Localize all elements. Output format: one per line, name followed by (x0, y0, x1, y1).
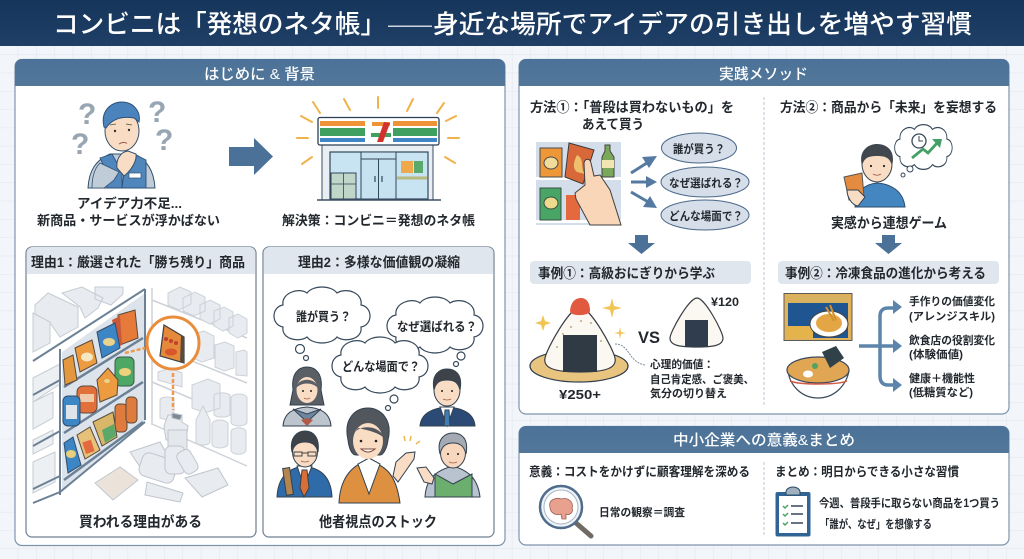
label: ¥120: ¥120 (711, 297, 739, 309)
title banner: コンビニは「発想のネタ帳」 (53, 11, 386, 39)
label: VS: VS (638, 329, 660, 347)
illustration: regular onigiri (670, 298, 723, 347)
text: 解決策: 解決策：コンビニ＝発想のネタ帳 (282, 213, 475, 228)
question bubbles: 誰が買う？ (673, 142, 725, 156)
text: trend list: 健康＋機能性 (909, 371, 975, 385)
question bubbles: どんな場面で？ (669, 209, 743, 223)
caption: 買われる理由がある: 買われる理由がある (79, 513, 202, 531)
panel: 実践メソッド (519, 59, 1009, 414)
heading: 理由1: 理由1：厳選された「勝ち残り」商品 (31, 254, 245, 270)
arrow: problem to solution (229, 138, 273, 175)
illustration: premium onigiri (530, 298, 645, 382)
arrow: down 1 (628, 235, 655, 254)
icon: clipboard (776, 487, 810, 536)
text: 意義: 意義：コストをかけずに顧客理解を深める (529, 464, 750, 479)
question bubbles (661, 133, 749, 230)
heading: 中小企業への意義&まとめ: 中小企業への意義&まとめ (673, 432, 855, 449)
illustration: store shelves (33, 287, 247, 503)
panel: 中小企業への意義&まとめ (519, 426, 1009, 545)
illustration: ramen bowl (787, 346, 849, 398)
text: trend list: (低糖質など) (909, 385, 973, 399)
man with glasses (277, 431, 332, 497)
text: アイデア力不足: 新商品・サービスが浮かばない (37, 213, 220, 228)
businessman (420, 369, 475, 426)
text: アイデア力不足: アイデア力不足... (77, 196, 182, 211)
case bar 1 (530, 261, 751, 284)
text: trend list: 飲食店の役割変化 (909, 333, 995, 347)
text: 心理的価値: 心理的価値： (650, 357, 714, 371)
question bubbles: なぜ選ばれる？ (669, 176, 743, 190)
illustration: frozen noodles package (784, 294, 852, 340)
thought bubbles: 誰が買う？ (296, 309, 351, 324)
illustration: picking unusual product (536, 142, 621, 225)
title banner: ―― (388, 12, 432, 37)
text: 日常の観察＝調査: 日常の観察＝調査 (599, 505, 685, 519)
gray shelf right (152, 287, 247, 466)
people (277, 367, 480, 503)
icon: convenience store (297, 97, 459, 200)
callout: highlighted product (125, 317, 199, 410)
case bar 2: 事例②：冷凍食品の進化から考える (785, 265, 986, 281)
text: まとめ: まとめ：明日からできる小さな習慣 (775, 464, 959, 479)
text: action items: 今週、普段手に取らない商品を1つ買う (819, 496, 1000, 510)
text: action items: 「誰が、なぜ」を想像する (820, 517, 932, 531)
arrows: tree (859, 300, 902, 392)
icon: worker thinking (71, 96, 173, 188)
panel: はじめに & 背景 (15, 59, 505, 546)
woman presenter (339, 408, 420, 503)
text: 心理的価値: 気分の切り替え (650, 386, 727, 400)
subpanel: 理由2 (263, 247, 494, 537)
products (118, 310, 138, 345)
icon: magnifier with brain (540, 486, 591, 536)
text: 心理的価値 (650, 357, 754, 400)
thought bubbles: なぜ選ばれる？ (397, 319, 477, 334)
text: アイデア力不足 (37, 196, 220, 228)
text: 心理的価値: 自己肯定感、ご褒美、 (650, 372, 754, 386)
heading: 理由2: 理由2：多様な価値観の凝縮 (298, 254, 460, 270)
label: ¥250+: ¥250+ (559, 387, 601, 402)
elderly man (417, 433, 480, 497)
text: trend list (909, 294, 995, 399)
text: trend list: (アレンジスキル) (909, 310, 995, 323)
text: trend list: 手作りの価値変化 (909, 294, 995, 308)
arrow: down 2 (875, 235, 902, 254)
icon: worker thinking: ? (148, 96, 166, 129)
case bar 2 (778, 261, 999, 284)
schoolgirl (283, 367, 331, 426)
method 1 heading (530, 99, 734, 132)
gray boxes on top (33, 287, 123, 493)
illustration: imagining future (844, 125, 952, 207)
thought bubbles (274, 287, 483, 410)
caption: 他者視点のストック: 他者視点のストック (319, 513, 437, 531)
text: action items (819, 496, 1000, 531)
subpanel: 理由1 (26, 247, 256, 537)
case bar 1: 事例①：高級おにぎりから学ぶ (538, 265, 715, 281)
thought bubbles: どんな場面で？ (342, 359, 420, 374)
method 1 heading: あえて買う (582, 117, 644, 132)
method 1 heading: 方法①：「普段は買わないもの」を (530, 99, 734, 115)
arrows: to questions (631, 156, 657, 208)
title banner: 身近な場所でアイデアの引き出しを増やす習慣 (433, 10, 972, 39)
text: trend list: (体験価値) (909, 347, 963, 361)
icon: worker thinking: ? (155, 124, 173, 157)
main shelf unit (62, 293, 145, 492)
title banner (0, 0, 1024, 46)
gray discarded items (95, 413, 228, 502)
heading: 実践メソッド: 実践メソッド (719, 66, 808, 83)
icon: worker thinking: ? (71, 128, 89, 161)
caption: 実感から連想ゲーム: 実感から連想ゲーム (831, 215, 947, 231)
heading: はじめに & 背景: はじめに & 背景 (204, 65, 315, 83)
icon: worker thinking: ? (78, 98, 96, 131)
method 2 heading: 方法②：商品から「未来」を妄想する (780, 99, 997, 115)
